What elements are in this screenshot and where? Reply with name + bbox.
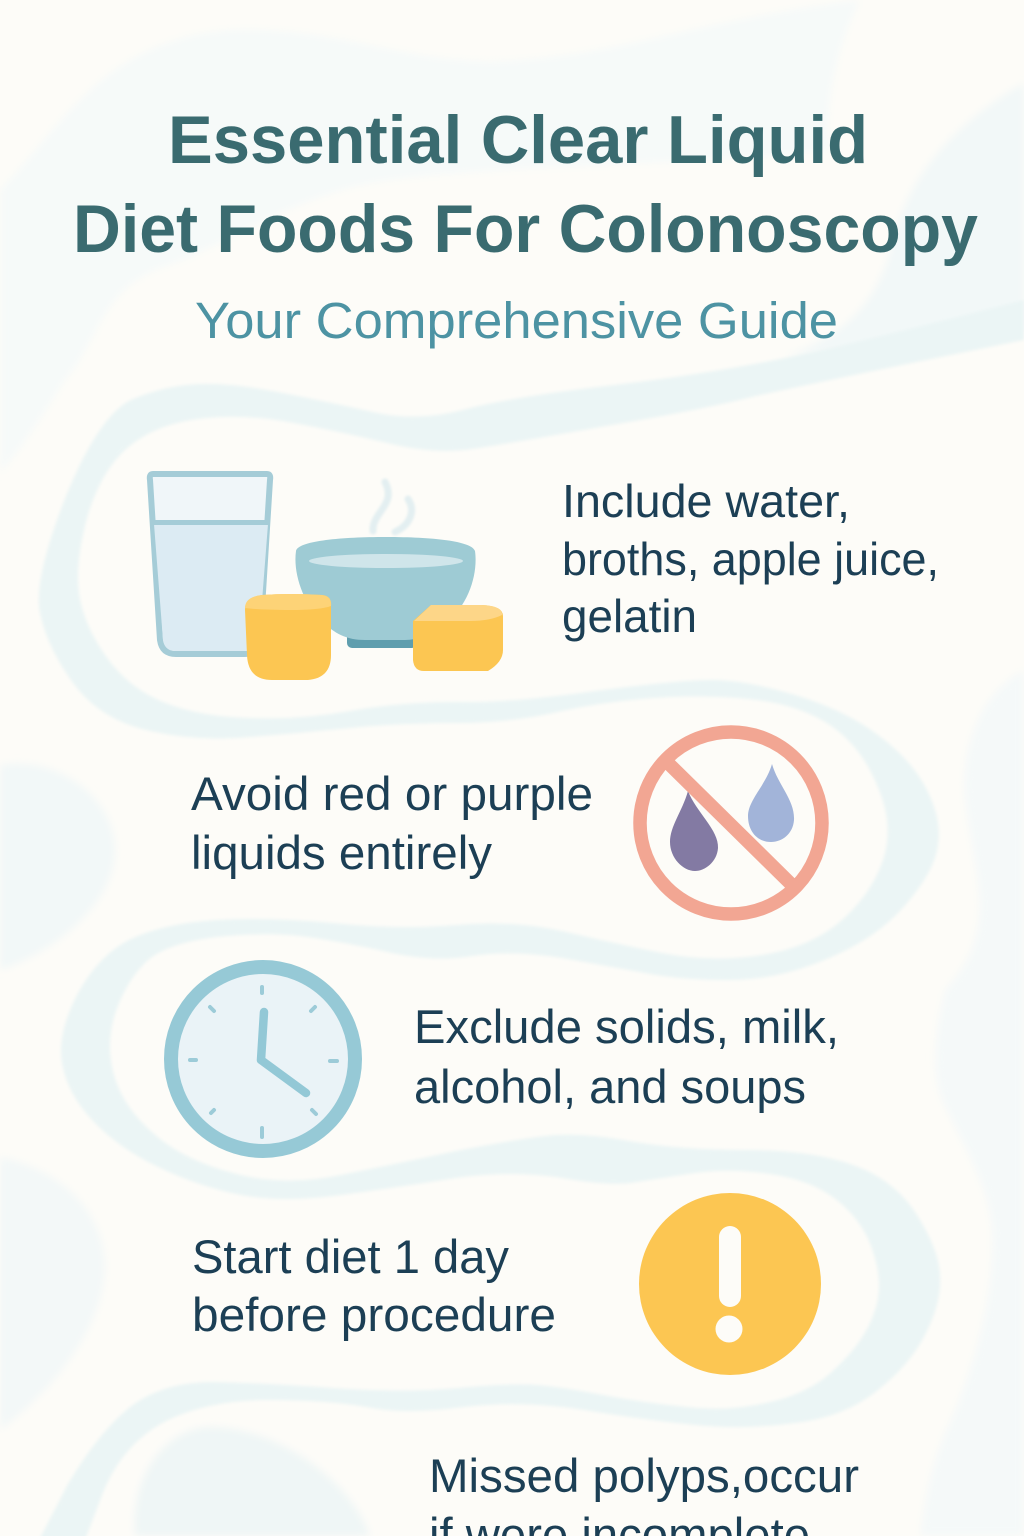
text: exclude (414, 1000, 839, 1113)
icon: glass, bowl and gelatin (150, 474, 503, 680)
icon: steam (373, 482, 412, 532)
text: include: Include water, (562, 475, 850, 527)
text: missed polyps (429, 1449, 859, 1536)
icon: clock (171, 967, 355, 1151)
text: include: broths, apple juice, (562, 533, 939, 585)
text: avoid (191, 767, 593, 879)
text: include (562, 475, 939, 642)
icon: warning (639, 1193, 821, 1375)
text: exclude: Exclude solids, milk, (414, 1000, 839, 1053)
subtitle: Your Comprehensive Guide (195, 292, 838, 349)
title: Diet Foods For Colonoscopy (73, 191, 978, 267)
text: start: Start diet 1 day (192, 1230, 509, 1283)
text: include: gelatin (562, 590, 697, 642)
text: missed polyps: Missed polyps,occur (429, 1449, 859, 1502)
icon: blue drop (748, 764, 794, 842)
text: start (192, 1230, 556, 1341)
icon: bowl (295, 537, 476, 648)
title (73, 102, 978, 267)
text: exclude: alcohol, and soups (414, 1060, 806, 1113)
icon: gelatin cube left (245, 594, 331, 680)
icon: gelatin cube right (413, 605, 503, 671)
text: avoid: liquids entirely (191, 826, 493, 879)
icon: no red or purple liquids (640, 732, 822, 914)
text: avoid: Avoid red or purple (191, 767, 593, 820)
title: Essential Clear Liquid (168, 102, 868, 178)
text: start: before procedure (192, 1288, 556, 1341)
icon: water glass (150, 474, 270, 654)
icon: purple drop (670, 791, 718, 871)
